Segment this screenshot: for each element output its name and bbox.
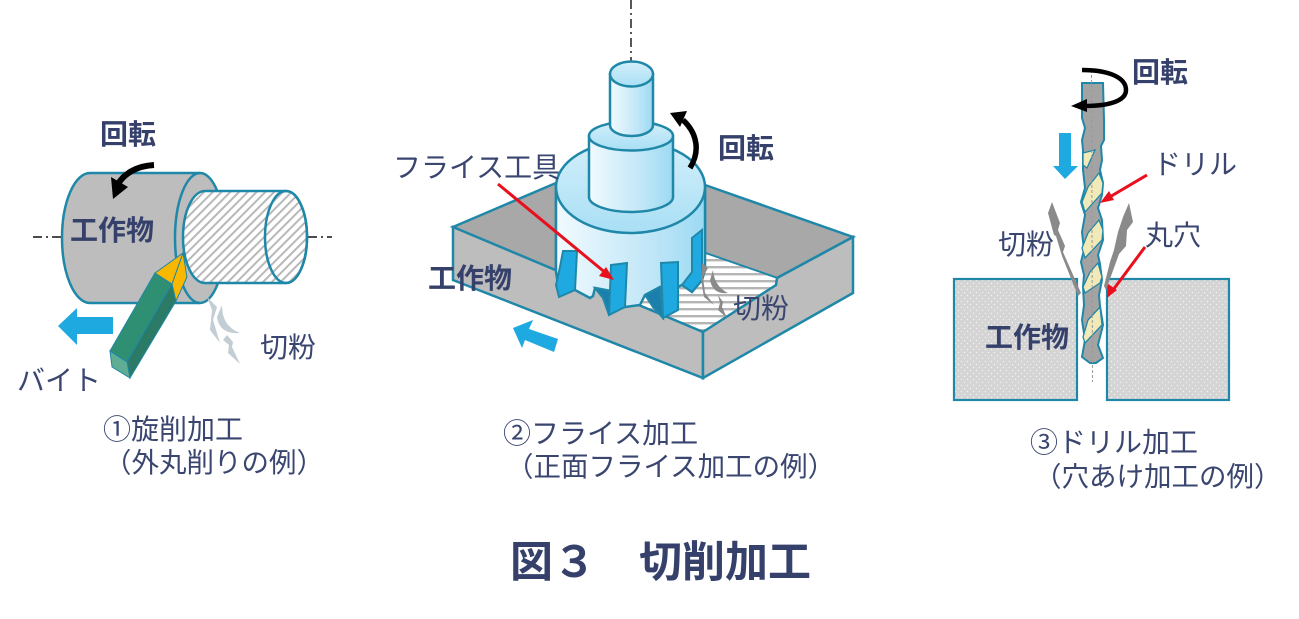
label: rotation: 回転 xyxy=(100,119,156,150)
cutter top ellipse xyxy=(556,141,705,233)
cut section end ellipse xyxy=(265,191,307,283)
icon: rotation arrow xyxy=(670,111,696,168)
icon: rotation arrow xyxy=(111,165,154,199)
caption: drilling xyxy=(1030,427,1282,492)
label: chips: 切粉 xyxy=(998,229,1054,260)
caption: milling xyxy=(503,418,835,482)
label: workpiece: 工作物 xyxy=(70,215,154,246)
cutter middle step xyxy=(589,136,673,212)
icon: right chip xyxy=(1104,203,1133,290)
label: rotation: 回転 xyxy=(718,133,774,164)
red leader arrow: drill xyxy=(1100,175,1147,203)
panel: drilling xyxy=(954,57,1282,492)
panel: turning xyxy=(17,119,332,478)
label: round hole: 丸穴 xyxy=(1145,220,1201,251)
caption: drilling: ③ドリル加工 xyxy=(1030,427,1198,458)
icon: feed arrow xyxy=(513,320,558,352)
label: milling tool: フライス工具 xyxy=(393,152,560,183)
caption: turning: ①旋削加工 xyxy=(103,414,243,445)
icon: chips xyxy=(207,297,240,364)
label: workpiece: 工作物 xyxy=(428,263,512,294)
label: drill: ドリル xyxy=(1153,149,1237,180)
icon: rotation arrow xyxy=(1071,70,1126,112)
axis line: milling xyxy=(630,0,632,62)
icon: left chip xyxy=(1048,202,1081,296)
label: chips: 切粉 xyxy=(733,293,789,324)
workpiece: back walls xyxy=(453,183,853,278)
icon: feed arrow xyxy=(1053,133,1078,179)
label: rotation: 回転 xyxy=(1132,57,1188,88)
red leader arrow: hole xyxy=(1107,247,1145,298)
workpiece: machined floor xyxy=(597,253,777,332)
cutter shank top xyxy=(610,62,653,86)
milling cutter body xyxy=(556,187,705,307)
caption: milling: （正面フライス加工の例） xyxy=(506,451,835,482)
label: workpiece: 工作物 xyxy=(985,322,1069,353)
drill body xyxy=(1081,83,1104,363)
caption: turning: （外丸削りの例） xyxy=(104,447,324,478)
workpiece shoulder edge xyxy=(175,173,200,303)
workpiece left block xyxy=(954,279,1077,400)
workpiece right block xyxy=(1107,279,1229,400)
drill centerline xyxy=(1092,70,1093,382)
caption: milling: ②フライス加工 xyxy=(503,418,698,449)
cutter middle step top xyxy=(589,122,673,150)
panel: milling xyxy=(393,0,853,482)
workpiece large cylinder xyxy=(62,173,225,303)
icon: chips xyxy=(701,263,728,318)
icon: feed arrow xyxy=(58,308,113,345)
workpiece: left face xyxy=(453,227,703,378)
workpiece cut section xyxy=(183,191,307,283)
label: chips: 切粉 xyxy=(260,332,316,363)
red leader arrow xyxy=(498,184,614,280)
axis line: turning xyxy=(33,236,332,238)
drill flutes xyxy=(1082,150,1103,343)
cutter shank xyxy=(610,74,653,136)
cutter teeth xyxy=(556,230,702,318)
caption: turning xyxy=(103,414,324,478)
workpiece: right face xyxy=(703,237,853,378)
caption: drilling: （穴あけ加工の例） xyxy=(1034,461,1282,492)
icon: cutting tool xyxy=(110,253,187,378)
label: cutting tool: バイト xyxy=(17,365,101,396)
title: 図３ 切削加工 xyxy=(510,539,811,587)
